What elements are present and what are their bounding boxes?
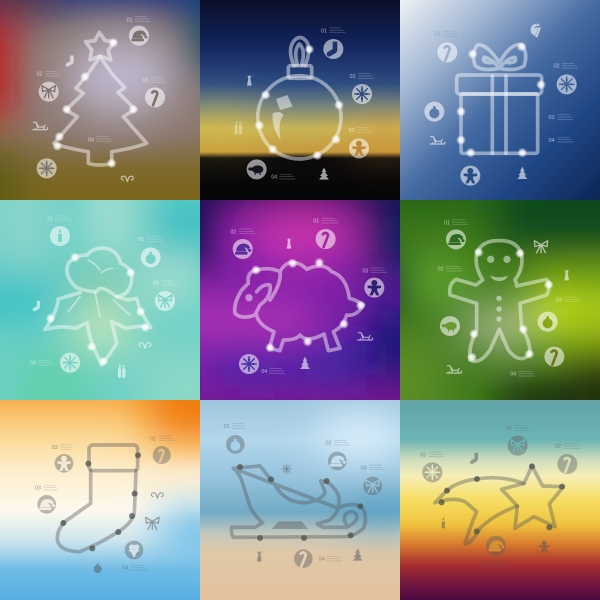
label 04: 04 bbox=[319, 557, 325, 563]
icon: snowflake bbox=[352, 84, 372, 104]
label 01 bbox=[506, 426, 529, 432]
panel: stocking infographic bbox=[0, 333, 267, 600]
label 01: 01 bbox=[313, 219, 319, 225]
icon: gingerbread bbox=[539, 541, 550, 553]
icon: sleigh bbox=[358, 333, 373, 340]
icon: angel bbox=[562, 269, 571, 280]
label 03: 03 bbox=[556, 297, 562, 303]
bauble outline bbox=[258, 37, 341, 159]
gift outline bbox=[457, 45, 542, 153]
label 01: 01 bbox=[47, 216, 53, 222]
icon: bow bbox=[363, 477, 382, 495]
icon: candy cane bbox=[544, 347, 564, 367]
icon: sleigh bbox=[447, 366, 462, 373]
icon: bauble bbox=[538, 312, 558, 332]
label 02 bbox=[555, 444, 580, 450]
icon: angel bbox=[285, 237, 293, 249]
icon: santa hat bbox=[37, 495, 56, 514]
panel: gingerbread infographic bbox=[333, 133, 600, 443]
label 02 bbox=[326, 440, 349, 447]
gingerbread face and buttons bbox=[487, 256, 511, 322]
label 03 bbox=[556, 297, 580, 303]
icon: snowflake bbox=[282, 464, 291, 474]
label 02: 02 bbox=[438, 267, 444, 273]
label 04 bbox=[30, 360, 53, 367]
label 03 bbox=[142, 78, 167, 82]
ornaments bbox=[60, 452, 141, 551]
label 03 bbox=[420, 452, 444, 458]
label 02 bbox=[438, 266, 463, 273]
icon: bow bbox=[155, 291, 175, 311]
panel: Christmas bauble infographic bbox=[200, 0, 400, 200]
label 02 bbox=[230, 229, 255, 235]
holly outline bbox=[45, 248, 151, 365]
label 04 bbox=[484, 562, 507, 568]
tree outline bbox=[54, 32, 147, 165]
label 03 bbox=[549, 115, 573, 121]
icon: tree bbox=[517, 167, 527, 179]
label 01: 01 bbox=[444, 220, 450, 226]
label 02: 02 bbox=[52, 445, 58, 451]
label 04: 04 bbox=[484, 562, 490, 568]
label 03 bbox=[153, 280, 177, 287]
icon: santa hat bbox=[446, 229, 466, 249]
label 04 bbox=[88, 137, 112, 143]
icon: bauble bbox=[226, 435, 245, 454]
icon: sleigh bbox=[430, 137, 445, 144]
label 01: 01 bbox=[321, 29, 327, 35]
label 03 bbox=[362, 268, 387, 274]
label 03 bbox=[361, 465, 384, 471]
icon: holly bbox=[125, 541, 143, 559]
lights bbox=[52, 38, 138, 168]
icon: gift bbox=[118, 365, 125, 378]
label 02: 02 bbox=[555, 444, 561, 450]
label 04 bbox=[122, 565, 147, 572]
label 04 bbox=[510, 371, 535, 378]
label 02 bbox=[554, 63, 578, 70]
icon: stocking bbox=[66, 55, 74, 67]
shooting star outline bbox=[435, 466, 563, 544]
icon: gingerbread bbox=[349, 138, 369, 158]
icon: gingerbread bbox=[55, 454, 73, 473]
label 03: 03 bbox=[35, 486, 41, 492]
label 04: 04 bbox=[510, 372, 516, 378]
icon: candy cane bbox=[294, 549, 313, 568]
label 01 bbox=[47, 216, 72, 222]
icon: santa hat bbox=[129, 26, 149, 46]
lights bbox=[254, 44, 344, 160]
icon: tree bbox=[353, 548, 363, 561]
label 02 bbox=[138, 237, 163, 243]
icon: ram horns bbox=[139, 343, 151, 348]
label 01: 01 bbox=[224, 424, 230, 430]
icon: snowflake bbox=[422, 462, 442, 482]
icon: bauble bbox=[94, 563, 102, 573]
panel: sleigh infographic bbox=[200, 400, 413, 600]
sleigh seat bbox=[272, 521, 308, 529]
gingerbread outline bbox=[450, 241, 549, 361]
label 03: 03 bbox=[349, 128, 355, 134]
icon: candle bbox=[50, 226, 70, 246]
label 02: 02 bbox=[554, 64, 560, 70]
label 01: 01 bbox=[506, 426, 512, 432]
label 02 bbox=[52, 445, 73, 451]
panel: Christmas tree infographic bbox=[0, 0, 200, 200]
icon: snowflake bbox=[239, 354, 259, 374]
lights bbox=[251, 258, 366, 353]
panel: shooting star infographic bbox=[400, 400, 600, 600]
label 02: 02 bbox=[138, 237, 144, 243]
ornaments bbox=[439, 463, 565, 534]
icon: candy cane bbox=[557, 454, 577, 474]
label 04: 04 bbox=[88, 137, 94, 143]
label 02 bbox=[36, 71, 60, 76]
label 04: 04 bbox=[122, 566, 128, 572]
icon: tree bbox=[319, 167, 329, 180]
icon: stocking bbox=[323, 39, 343, 59]
sheep eye bbox=[245, 294, 253, 301]
label 03 bbox=[349, 128, 372, 134]
icon: sheep bbox=[440, 316, 460, 336]
stocking outline bbox=[57, 445, 138, 552]
icon: bow bbox=[508, 436, 528, 456]
icon: bow bbox=[39, 82, 59, 102]
icon: angel bbox=[245, 74, 254, 86]
icon: santa hat bbox=[486, 536, 506, 556]
icon: gingerbread bbox=[460, 166, 480, 186]
label 03: 03 bbox=[361, 465, 367, 471]
panel: gift box infographic bbox=[400, 0, 600, 200]
panel: holly infographic bbox=[0, 167, 233, 430]
label 03: 03 bbox=[362, 268, 368, 274]
icon: ram horns bbox=[121, 176, 133, 182]
icon: candle bbox=[442, 517, 445, 528]
panel: sheep infographic bbox=[100, 133, 477, 457]
label 03: 03 bbox=[549, 115, 555, 121]
icon: gift bbox=[235, 122, 242, 134]
icon: stocking bbox=[470, 453, 478, 464]
ornaments bbox=[237, 464, 363, 541]
icon: candy cane bbox=[145, 87, 165, 107]
icon: santa hat bbox=[530, 24, 541, 38]
label 04: 04 bbox=[549, 138, 555, 144]
label 03 bbox=[35, 485, 57, 492]
icon: bauble bbox=[424, 102, 444, 122]
sleigh outline bbox=[231, 466, 365, 537]
label 03: 03 bbox=[143, 78, 149, 84]
icon: sheep bbox=[247, 159, 267, 179]
bauble highlights bbox=[273, 95, 293, 140]
label 04 bbox=[261, 369, 285, 375]
label 02: 02 bbox=[230, 229, 236, 235]
lights bbox=[456, 42, 546, 158]
label 01 bbox=[224, 424, 246, 430]
label 02 bbox=[350, 74, 374, 80]
icon: gingerbread bbox=[364, 278, 384, 298]
label 04: 04 bbox=[261, 369, 267, 375]
lights bbox=[467, 247, 554, 362]
label 01 bbox=[434, 31, 458, 36]
icon: bow bbox=[146, 517, 159, 530]
icon: candy cane bbox=[316, 229, 336, 249]
sheep outline bbox=[235, 262, 363, 351]
label 01 bbox=[444, 220, 468, 226]
icon: sleigh bbox=[33, 122, 48, 130]
label 04: 04 bbox=[271, 175, 277, 181]
label 01: 01 bbox=[150, 436, 156, 442]
label 04 bbox=[549, 137, 573, 144]
icon: candy cane bbox=[153, 446, 171, 464]
label 02: 02 bbox=[326, 441, 332, 447]
label 04: 04 bbox=[30, 361, 36, 367]
icon: snowflake bbox=[557, 74, 577, 94]
label 02: 02 bbox=[350, 74, 356, 80]
icon: snowflake bbox=[60, 353, 80, 373]
icon: bow bbox=[534, 241, 548, 253]
label 01 bbox=[127, 17, 151, 23]
lights bbox=[46, 252, 150, 366]
icon: snowflake bbox=[37, 158, 57, 178]
label 02: 02 bbox=[37, 72, 43, 78]
icon: stocking bbox=[33, 301, 40, 311]
icon: angel bbox=[255, 550, 264, 562]
icon: santa hat bbox=[233, 239, 253, 259]
label 01 bbox=[321, 28, 346, 33]
label 01 bbox=[150, 436, 175, 442]
icon: santa hat bbox=[328, 452, 347, 470]
label 01: 01 bbox=[127, 17, 133, 23]
icon: candy cane bbox=[437, 42, 457, 62]
icon: bauble bbox=[141, 247, 161, 267]
label 04 bbox=[272, 174, 296, 180]
icon: ram horns bbox=[151, 493, 163, 498]
label 03: 03 bbox=[420, 452, 426, 458]
label 03: 03 bbox=[153, 281, 159, 287]
label 04 bbox=[319, 556, 342, 563]
label 01 bbox=[313, 218, 338, 225]
label 01: 01 bbox=[435, 32, 441, 38]
icon: tree bbox=[300, 357, 310, 369]
